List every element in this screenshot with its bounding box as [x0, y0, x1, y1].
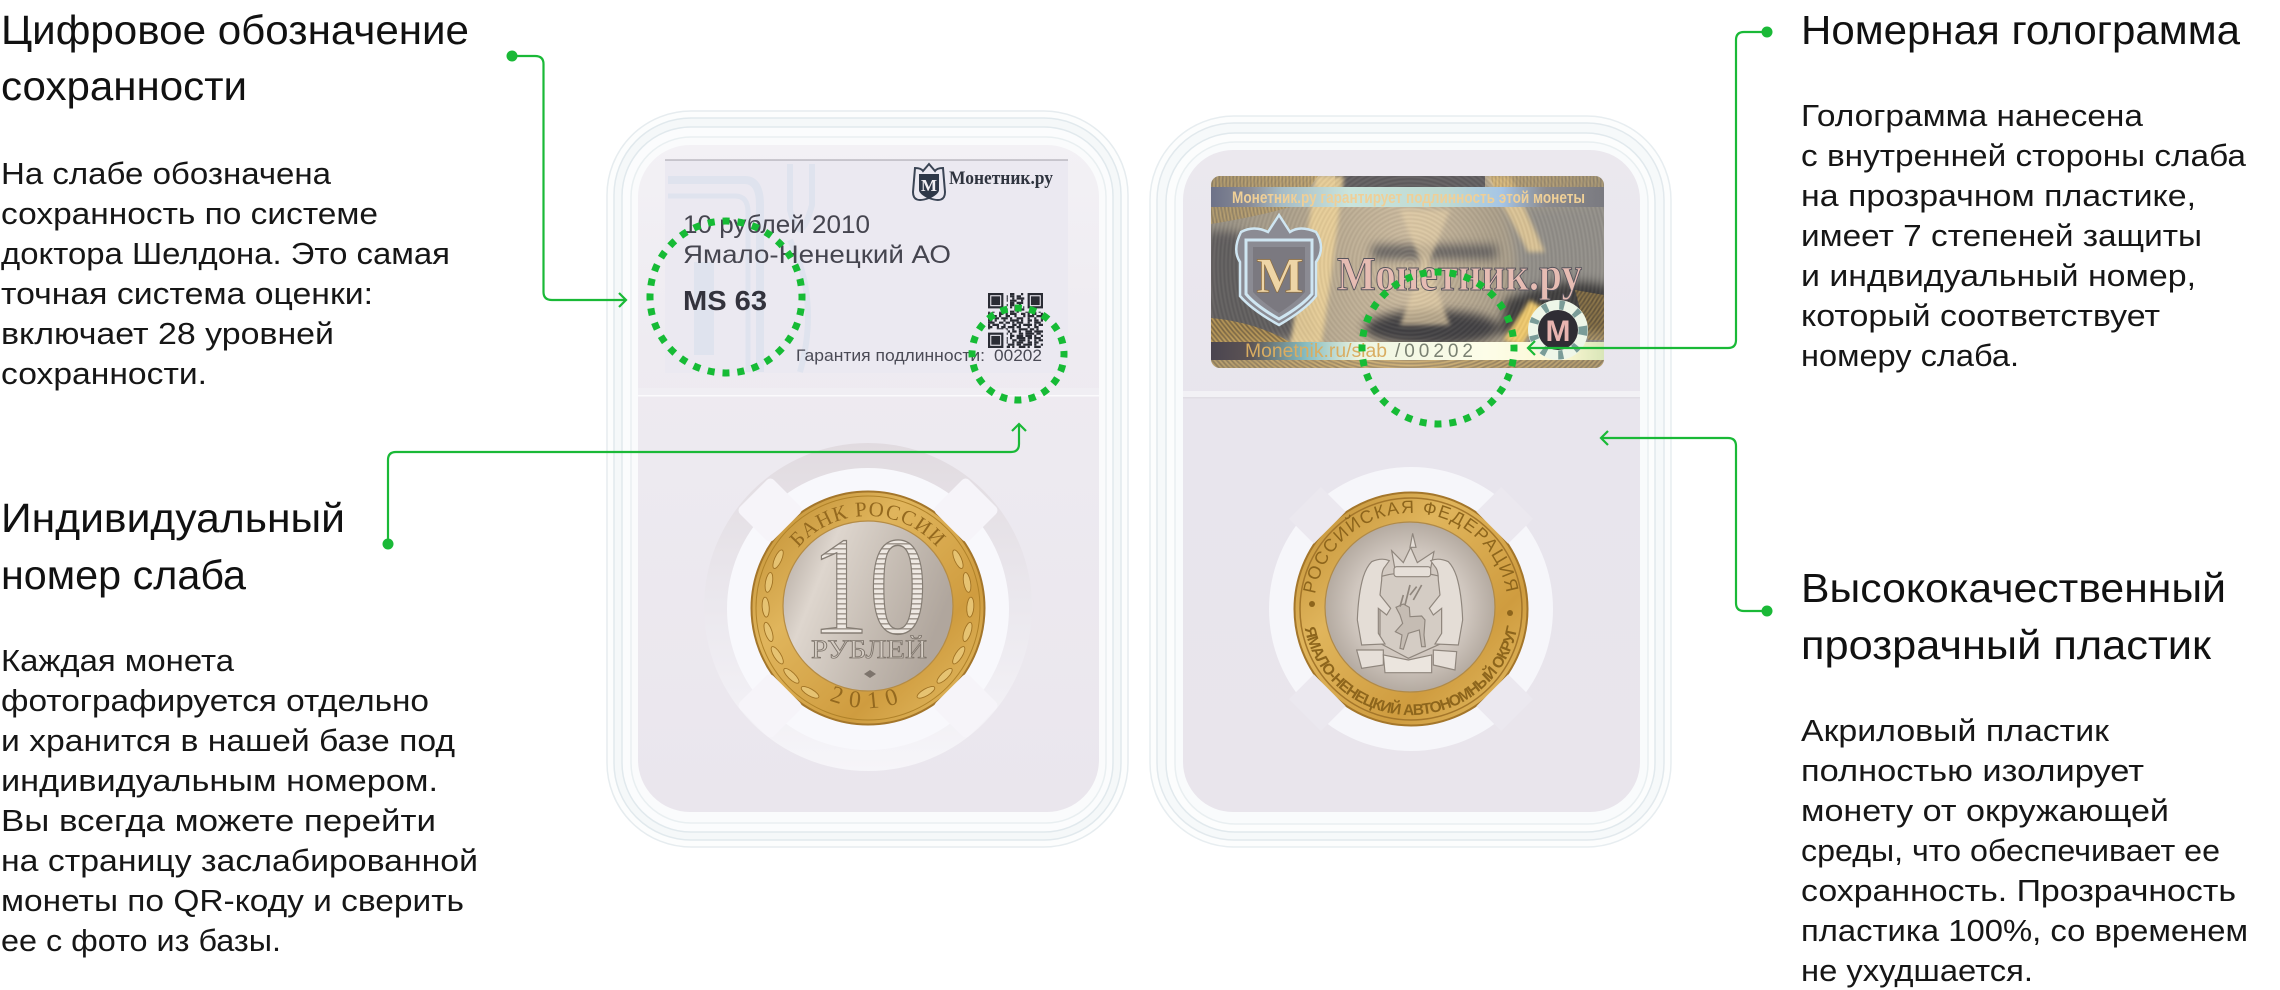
hologram bottom strip: Monetnik.ru/slab [1245, 341, 1387, 362]
slab inner panel [1183, 150, 1640, 812]
QR code [987, 292, 1044, 349]
hologram shield emblem [1236, 215, 1321, 325]
description: монеты по QR-коду и сверить [1, 884, 464, 918]
description: не ухудшается. [1801, 954, 2033, 988]
description: на прозрачном пластике, [1801, 179, 2196, 213]
description: ее с фото из базы. [1, 924, 281, 958]
coin holder tabs [1289, 487, 1533, 731]
description: с внутренней стороны слаба [1801, 139, 2246, 173]
slab inner panel [638, 145, 1099, 812]
coin: 10 rubles obverse [750, 490, 986, 726]
coat of arms [1357, 533, 1463, 673]
right bear [1429, 559, 1463, 645]
hologram bottom strip [1211, 342, 1604, 360]
paper label: 00202 [994, 347, 1042, 365]
heading: прозрачный пластик [1801, 622, 2212, 668]
shield [1380, 572, 1442, 658]
callout arrow: hologram [1528, 26, 1772, 355]
divider ridge [1183, 391, 1640, 398]
heading: Высококачественный [1801, 565, 2226, 611]
coin name: 10 рублей 2010 [683, 211, 870, 239]
description: сохранность по системе [1, 197, 378, 231]
description: Голограмма нанесена [1801, 99, 2143, 133]
coin ring lettering: БАНК РОССИИ [788, 502, 946, 548]
slab plastic frame [1150, 116, 1671, 847]
hologram top dark block [1335, 176, 1485, 188]
divider ridge [638, 388, 1099, 396]
coin holder tabs [736, 476, 1000, 740]
description: монету от окружающей [1801, 794, 2169, 828]
callout arrow: serial number [382, 424, 1026, 550]
crown [1392, 547, 1434, 575]
description: имеет 7 степеней защиты [1801, 219, 2202, 253]
mint mark [864, 670, 876, 678]
heading: Индивидуальный [1, 495, 345, 541]
dotted circle: grade [650, 221, 802, 373]
dotted circle: hologram number [1362, 272, 1514, 424]
hologram seal [1528, 300, 1588, 360]
hologram soft dark areas [1205, 207, 1610, 346]
hologram shield emblem: М [1256, 247, 1304, 303]
paper label: Ямало-Ненецкий АО [683, 241, 951, 269]
dotted circle: serial number [972, 308, 1064, 400]
hologram seal: М [1546, 315, 1570, 348]
hologram gold streaks [1290, 176, 1546, 345]
callout arrow: plastic [1601, 431, 1772, 616]
description: доктора Шелдона. Это самая [1, 237, 450, 271]
description: номеру слаба. [1801, 339, 2019, 373]
description [1801, 99, 2246, 373]
hologram brand name: Монетник.ру [1337, 248, 1582, 301]
coin: 10 rubles obverse: 2010 [830, 686, 897, 708]
slab: obverse side [606, 110, 1129, 848]
description: Вы всегда можете перейти [1, 804, 436, 838]
slab plastic frame [607, 111, 1128, 847]
description [1, 644, 478, 958]
description: Акриловый пластик [1801, 714, 2110, 748]
description: На слабе обозначена [1, 157, 331, 191]
text block: hologram [1801, 7, 2246, 373]
logo Monetnik on label: Монетник.ру [949, 168, 1053, 189]
heading: Цифровое обозначение [1, 7, 469, 53]
denomination word: РУБЛЕЙ [811, 635, 927, 664]
description [1801, 714, 2248, 988]
description: сохранность. Прозрачность [1801, 874, 2236, 908]
heading: Номерная голограмма [1801, 7, 2240, 53]
description: среды, что обеспечивает ее [1801, 834, 2220, 868]
description: и хранится в нашей базе под [1, 724, 455, 758]
callout arrow: grade [506, 50, 626, 307]
description: фотографируется отдельно [1, 684, 429, 718]
description [1, 157, 450, 391]
heading [1, 495, 345, 598]
paper label [665, 159, 1068, 373]
hologram gold moire corners [1211, 176, 1604, 368]
text block: plastic [1801, 565, 2248, 988]
heading: номер слаба [1, 552, 246, 598]
description: на страницу заслабированной [1, 844, 478, 878]
coin holder recess [704, 443, 1032, 771]
heading: сохранности [1, 63, 247, 109]
description: индивидуальным номером. [1, 764, 438, 798]
logo Monetnik on label: М [921, 176, 937, 195]
description: сохранности. [1, 357, 207, 391]
hologram guilloche pattern [1211, 176, 1604, 342]
coin: regional reverse: ЯМАЛО-НЕНЕЦКИЙ АВТОНОМНЫЙ ОКРУГ [1304, 625, 1516, 716]
hologram top strip: Монетник.ру гарантирует подлинность этой монеты [1232, 188, 1585, 207]
description: точная система оценки: [1, 277, 373, 311]
description: полностью изолирует [1801, 754, 2144, 788]
slab: reverse side [1149, 115, 1672, 848]
text block: grade [1, 7, 469, 391]
hologram sticker [1205, 176, 1610, 368]
description: Каждая монета [1, 644, 234, 678]
left bear [1357, 559, 1391, 645]
coin: regional reverse [1294, 492, 1528, 726]
authenticity line: Гарантия подлинности: [796, 347, 985, 365]
hologram bottom strip: /00202 [1395, 341, 1473, 362]
text block: serial number [1, 495, 478, 958]
heading [1801, 565, 2226, 668]
description: пластика 100%, со временем [1801, 914, 2248, 948]
label watermark [668, 164, 812, 372]
grade: MS 63 [683, 285, 767, 316]
coin ring lettering: РОССИЙСКАЯ ФЕДЕРАЦИЯ [1303, 500, 1518, 593]
coin wreath [762, 549, 974, 700]
ribbons [1357, 650, 1457, 670]
denomination 10: 10 [811, 509, 927, 664]
coin holder window [1269, 467, 1553, 751]
heading [1, 7, 469, 109]
logo Monetnik on label [913, 164, 1053, 200]
deer [1395, 604, 1425, 649]
description: и индвидуальный номер, [1801, 259, 2196, 293]
description: включает 28 уровней [1, 317, 334, 351]
description: который соответствует [1801, 299, 2160, 333]
